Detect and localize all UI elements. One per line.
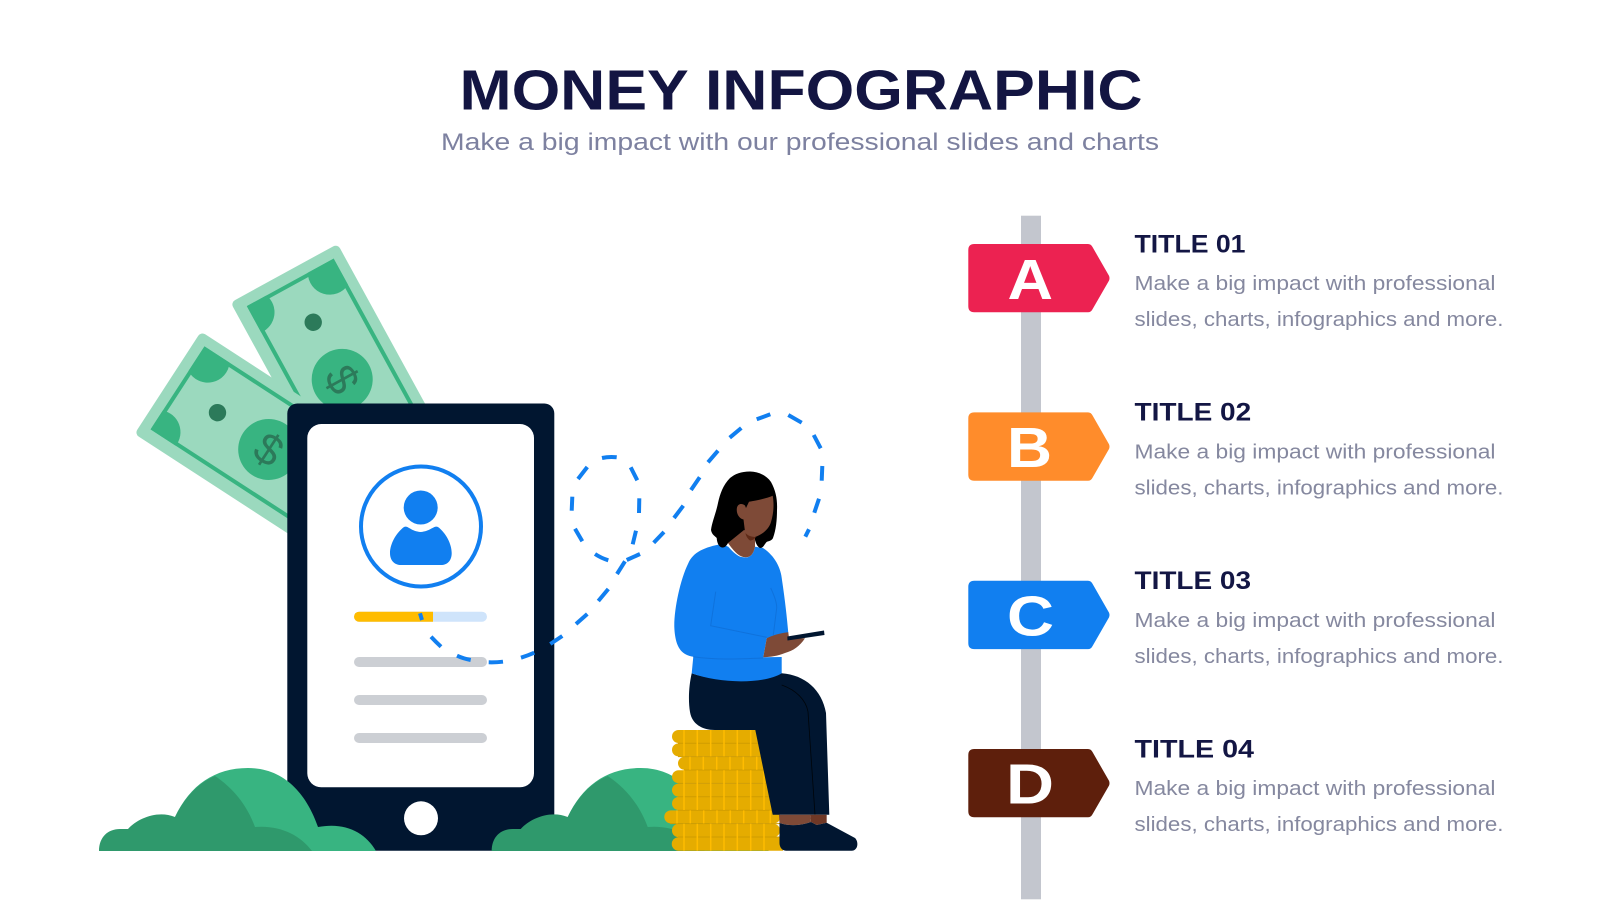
- subtitle: Make a big impact with our professional slides and charts: [441, 129, 1159, 156]
- tag A: A: [1008, 248, 1053, 312]
- icon: back banknote: [231, 244, 463, 532]
- icon: back banknote: $: [314, 357, 369, 402]
- handheld phone: [787, 630, 824, 640]
- icon: front banknote: [135, 332, 437, 587]
- body text 03: slides, charts, infographics and more.: [1134, 645, 1504, 668]
- tag B: B: [1007, 416, 1052, 480]
- face: [737, 496, 774, 540]
- title: MONEY INFOGRAPHIC: [460, 58, 1142, 121]
- item D: [968, 735, 1504, 836]
- body text 01: Make a big impact with professional: [1134, 272, 1496, 295]
- body text 04: Make a big impact with professional: [1134, 777, 1496, 800]
- tag D: D: [1006, 753, 1054, 817]
- neck: [728, 530, 755, 557]
- tag B: [968, 412, 1110, 481]
- hand: [763, 632, 805, 657]
- item B: [968, 399, 1504, 499]
- body text 01: slides, charts, infographics and more.: [1134, 308, 1504, 331]
- ankles: [779, 815, 827, 825]
- shoes: [780, 822, 857, 851]
- smartphone: [287, 404, 554, 851]
- hair: [711, 472, 777, 548]
- body text 02: Make a big impact with professional: [1134, 440, 1496, 463]
- icon: front banknote: $: [245, 423, 292, 477]
- tag C: [968, 581, 1110, 649]
- stack of gold coins: [664, 730, 788, 851]
- illustration: [99, 244, 857, 851]
- item A: [968, 230, 1504, 331]
- title 03: TITLE 03: [1134, 567, 1251, 595]
- tag C: C: [1007, 584, 1054, 648]
- icon: right bush: [492, 768, 769, 851]
- tag A: [968, 244, 1110, 312]
- body text 04: slides, charts, infographics and more.: [1134, 813, 1504, 836]
- title 02: TITLE 02: [1134, 399, 1251, 427]
- placeholder text lines: [354, 657, 487, 743]
- body text 02: slides, charts, infographics and more.: [1134, 476, 1504, 499]
- title 01: TITLE 01: [1134, 230, 1246, 258]
- vertical timeline bar: [1021, 216, 1041, 899]
- tag D: [968, 749, 1110, 817]
- sweater: [674, 544, 788, 681]
- title 04: TITLE 04: [1134, 735, 1254, 763]
- icon: user avatar: [361, 466, 481, 586]
- icon: left bush: [99, 768, 376, 851]
- item C: [968, 567, 1504, 668]
- seated woman with phone: [674, 472, 857, 851]
- legs: [689, 673, 829, 815]
- dashed flight path arrow: [420, 414, 822, 662]
- progress bar: [354, 612, 487, 622]
- body text 03: Make a big impact with professional: [1134, 609, 1496, 632]
